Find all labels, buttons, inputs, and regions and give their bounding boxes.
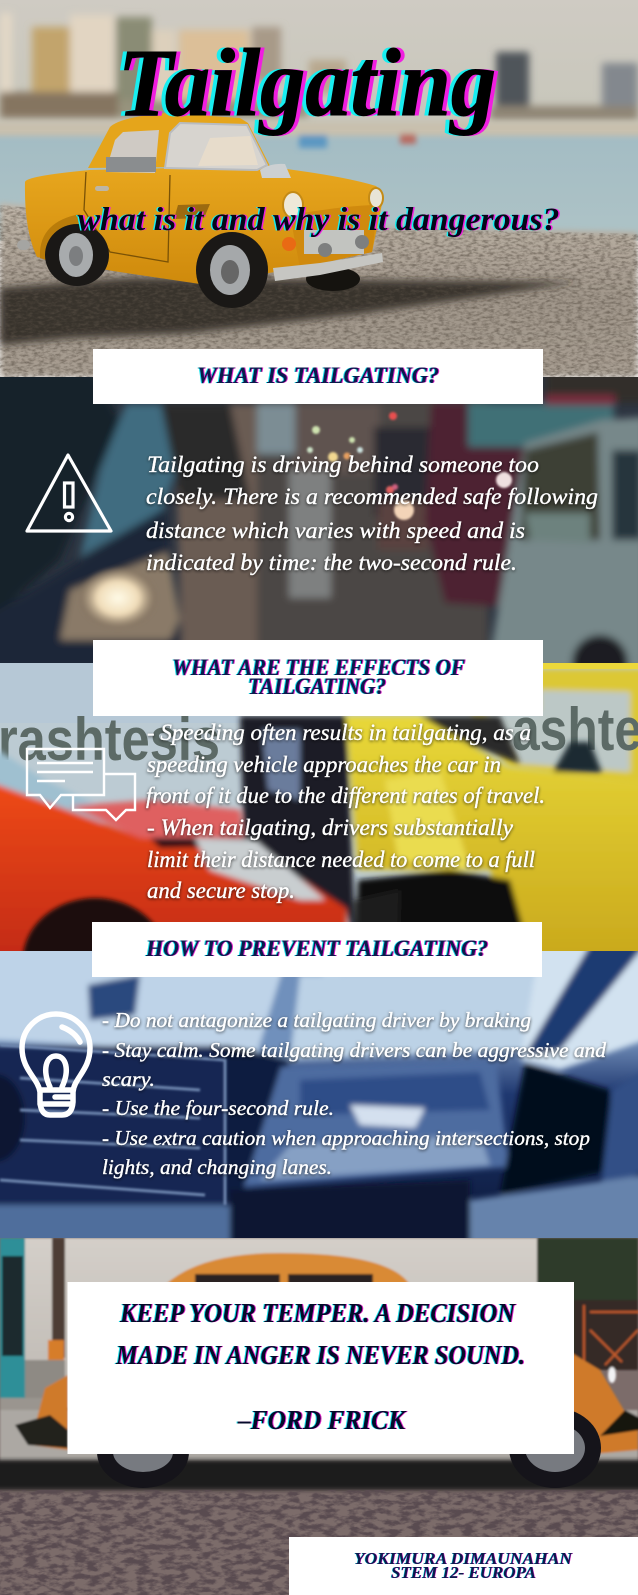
subtitle: what is it and why is it dangerous? [79,202,561,238]
heading box: what is tailgating: WHAT IS TAILGATING? [196,363,438,388]
title: Tailgating [118,29,496,136]
title: Tailgating [122,29,500,136]
author credit box [289,1537,638,1595]
text block: prevention: - Do not antagonize a tailgating driver by braking [102,1008,531,1032]
icon: yellow toy car [17,113,383,308]
text block: effects: speeding vehicle approaches the car in [147,752,501,777]
icon: warning triangle [27,455,111,531]
text block: prevention: - Use extra caution when approaching intersections, stop [102,1126,590,1150]
heading box: effects of tailgating [93,640,543,716]
heading box: how to prevent tailgating: HOW TO PREVENT TAILGATING? [145,936,488,961]
subtitle: what is it and why is it dangerous? [76,202,558,238]
quote box: KEEP YOUR TEMPER. A DECISION [120,1298,517,1328]
author credit box: YOKIMURA DIMAUNAHAN [354,1549,573,1568]
quote box: –FORD FRICK [237,1405,407,1435]
quote box: MADE IN ANGER IS NEVER SOUND. [116,1340,526,1370]
heading box: effects of tailgating: WHAT ARE THE EFFECTS OF [171,655,464,680]
heading box: effects of tailgating: TAILGATING? [247,674,385,699]
title: Tailgating [114,29,492,136]
car shadow [0,278,580,345]
heading box: what is tailgating: WHAT IS TAILGATING? [198,363,440,388]
heading box: effects of tailgating: WHAT ARE THE EFFECTS OF [173,655,466,680]
photo lettering: crash test banner [1,706,638,760]
quote box: MADE IN ANGER IS NEVER SOUND. [114,1340,524,1370]
text block: definition: closely. There is a recommended safe following [146,484,598,509]
author credit box: STEM 12- EUROPA [390,1563,536,1582]
text block: prevention [102,1008,606,1179]
author credit box: STEM 12- EUROPA [391,1563,536,1582]
quote box [68,1282,574,1454]
text block: effects: and secure stop. [147,878,295,903]
heading box: how to prevent tailgating: HOW TO PREVENT TAILGATING? [144,936,487,961]
heading box: what is tailgating [93,349,543,404]
quote box: MADE IN ANGER IS NEVER SOUND. [115,1340,525,1370]
heading box: effects of tailgating: TAILGATING? [249,674,387,699]
text block: prevention: - Use the four-second rule. [102,1096,334,1120]
text block: effects: - When tailgating, drivers substantially [147,815,514,840]
text block: prevention: - Stay calm. Some tailgating drivers can be aggressive and [102,1038,606,1062]
text block: definition: Tailgating is driving behind someone too [147,452,539,477]
subtitle: what is it and why is it dangerous? [78,202,560,238]
quote box: KEEP YOUR TEMPER. A DECISION [118,1298,515,1328]
heading box: effects of tailgating: TAILGATING? [248,674,386,699]
author credit box: YOKIMURA DIMAUNAHAN [354,1549,573,1568]
text block: effects: front of it due to the different rates of travel. [146,783,545,808]
heading box: effects of tailgating: WHAT ARE THE EFFECTS OF [172,655,465,680]
text block: definition: indicated by time: the two-second rule. [146,550,517,575]
text block: definition: distance which varies with speed and is [146,518,525,543]
panel: hero photo with toy car [0,0,638,377]
text block: definition [146,452,598,575]
panel: damaged headlight photo [0,945,638,1245]
icon: speech bubbles [27,749,135,820]
text block: prevention: scary. [102,1067,155,1091]
icon: light bulb [22,1014,90,1115]
panel: crash test photo [0,663,638,951]
author credit box: STEM 12- EUROPA [392,1563,536,1582]
text block: prevention: lights, and changing lanes. [102,1155,332,1179]
quote box: –FORD FRICK [238,1405,408,1435]
panel: traffic photo [0,377,638,663]
text block: effects [146,720,545,903]
photo lettering: crash test banner: rashtesis [0,706,220,773]
quote box: –FORD FRICK [236,1405,406,1435]
heading box: how to prevent tailgating: HOW TO PREVENT TAILGATING? [146,936,489,961]
text block: effects: limit their distance needed to come to a full [147,847,535,872]
panel: orange car photo [0,1238,638,1595]
quote box: KEEP YOUR TEMPER. A DECISION [119,1298,516,1328]
heading box: what is tailgating: WHAT IS TAILGATING? [197,363,439,388]
heading box: how to prevent tailgating [92,922,542,977]
text block: effects: - Speeding often results in tailgating, as a [147,720,531,745]
author credit box: YOKIMURA DIMAUNAHAN [354,1549,572,1568]
